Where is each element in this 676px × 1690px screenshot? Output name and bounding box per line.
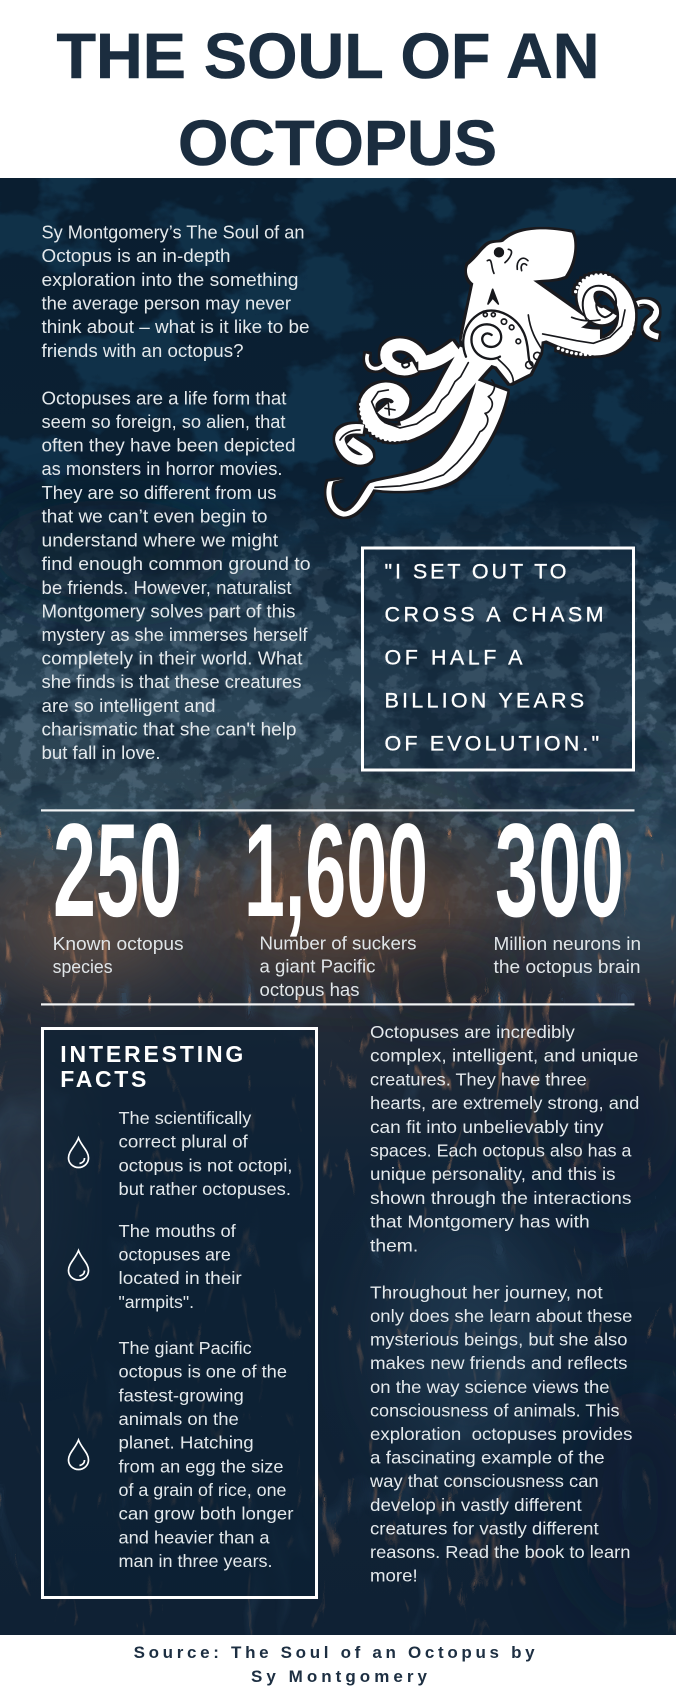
octopus line details — [340, 248, 653, 487]
right column text: them. — [370, 1235, 418, 1255]
intro text block: she finds is that these creatures — [42, 672, 302, 692]
stat: 250 species — [53, 797, 184, 977]
stats top divider — [41, 809, 634, 812]
fact 3 text — [118, 1338, 293, 1571]
right column text: more! — [370, 1566, 418, 1586]
intro text block: mystery as she immerses herself — [42, 625, 308, 645]
right column text: unique personality, and this is — [370, 1164, 616, 1184]
number 1,600: 1,600 — [244, 797, 428, 945]
facts heading: INTERESTING — [60, 1041, 243, 1067]
caption 250 — [53, 933, 184, 977]
caption 1,600 — [260, 932, 416, 1000]
intro text block: completely in their world. What — [42, 648, 302, 668]
right column text: Octopuses are incredibly — [370, 1022, 575, 1042]
intro text block: are so intelligent and — [42, 696, 216, 716]
right column text: Throughout her journey, not — [370, 1282, 603, 1302]
number 250: 250 — [53, 797, 182, 945]
facts heading: FACTS — [60, 1066, 146, 1092]
caption 300: the octopus brain — [494, 956, 640, 977]
caption 250: species — [53, 956, 113, 977]
intro text block: but fall in love. — [42, 743, 160, 763]
fact 2 icon: water drop — [68, 1250, 88, 1280]
right column text: consciousness of animals. This — [370, 1400, 620, 1420]
intro text block: that we can’t even begin to — [42, 506, 268, 526]
facts heading — [60, 1041, 243, 1092]
fact 2 text: located in their — [118, 1268, 242, 1288]
fact 3 icon: water drop — [68, 1440, 88, 1470]
stat: 300 neurons — [494, 797, 641, 977]
title: OCTOPUS — [178, 107, 497, 179]
right column text: on the way science views the — [370, 1377, 610, 1397]
intro text block: often they have been depicted — [42, 436, 296, 456]
octopus illustration — [326, 229, 658, 517]
intro text block: understand where we might — [42, 530, 278, 550]
fact 3 text: from an egg the size — [118, 1456, 284, 1476]
right column text: creatures for vastly different — [370, 1518, 599, 1538]
right column text: hearts, are extremely strong, and — [370, 1093, 639, 1113]
fact 1 text: octopus is not octopi, — [118, 1155, 292, 1175]
intro text block: find enough common ground to — [42, 554, 310, 574]
intro text block: charismatic that she can't help — [42, 720, 296, 740]
quote box: BILLION YEARS — [384, 689, 584, 713]
right column text: can fit into unbelievably tiny — [370, 1117, 604, 1137]
quote box: "I SET OUT TO — [384, 559, 566, 583]
intro text block: Octopuses are a life form that — [42, 388, 286, 408]
caption 300 — [494, 933, 641, 977]
fact 3 text: and heavier than a — [118, 1527, 270, 1547]
right column text — [369, 1022, 639, 1586]
quote box — [362, 548, 634, 770]
intro text block: Montgomery solves part of this — [42, 602, 296, 622]
right column text: spaces. Each octopus also has a — [370, 1140, 631, 1161]
source footer: Source: The Soul of an Octopus by — [134, 1643, 535, 1662]
right column text: shown through the interactions — [370, 1188, 631, 1208]
quote box: CROSS A CHASM — [384, 603, 604, 627]
caption 1,600: a giant Pacific — [260, 956, 376, 977]
intro text block: think about – what is it like to be — [42, 317, 310, 337]
stat: 1,600 suckers — [244, 797, 428, 1000]
intro text block: Octopus is an in-depth — [42, 246, 231, 266]
source footer: Sy Montgomery — [251, 1667, 428, 1686]
right column text: reasons. Read the book to learn — [370, 1542, 630, 1562]
intro text block: as monsters in horror movies. — [42, 459, 282, 479]
right column text: only does she learn about these — [370, 1306, 632, 1326]
right column text: a fascinating example of the — [370, 1448, 605, 1468]
fact 2 text — [118, 1221, 242, 1312]
fact 1 icon: water drop — [68, 1138, 88, 1168]
source footer — [134, 1643, 535, 1686]
fact 3 text: can grow both longer — [118, 1504, 293, 1524]
fact 3 text: octopus is one of the — [118, 1362, 287, 1382]
fact 1 text — [118, 1108, 292, 1199]
stats bottom divider — [41, 1003, 634, 1006]
right column text: exploration octopuses provides — [370, 1424, 632, 1444]
fact 1 text: correct plural of — [118, 1132, 249, 1152]
caption 1,600: octopus has — [260, 979, 360, 1000]
intro text block: be friends. However, naturalist — [42, 578, 292, 598]
intro text block: They are so different from us — [42, 483, 276, 503]
intro text block: exploration into the something — [42, 270, 298, 290]
fact 2 text: The mouths of — [118, 1221, 237, 1241]
fact 3 text: The giant Pacific — [118, 1338, 252, 1358]
caption 1,600: Number of suckers — [260, 932, 416, 953]
quote box: OF HALF A — [384, 645, 523, 669]
fact 3 text: man in three years. — [118, 1551, 273, 1571]
fact 1 text: but rather octopuses. — [118, 1179, 291, 1199]
caption 300: Million neurons in — [494, 933, 641, 954]
panel: interesting facts — [42, 1028, 316, 1598]
intro text block: Sy Montgomery’s The Soul of an — [42, 223, 304, 243]
fact 1 text: The scientifically — [118, 1108, 251, 1128]
octopus silhouette — [326, 229, 658, 517]
title: THE SOUL OF AN — [56, 20, 600, 92]
fact 2 text: "armpits". — [118, 1292, 194, 1312]
caption 250: Known octopus — [53, 933, 184, 954]
right column text: creatures. They have three — [370, 1069, 587, 1089]
title — [56, 20, 600, 179]
intro text block: seem so foreign, so alien, that — [42, 412, 286, 432]
right column text: complex, intelligent, and unique — [370, 1046, 638, 1066]
intro text block: the average person may never — [42, 294, 291, 314]
fact 3 text: animals on the — [118, 1409, 239, 1429]
right column text: that Montgomery has with — [370, 1212, 590, 1232]
intro text block: friends with an octopus? — [42, 341, 244, 361]
right column text: makes new friends and reflects — [370, 1353, 627, 1373]
right column text: mysterious beings, but she also — [370, 1330, 627, 1350]
right column text: way that consciousness can — [369, 1471, 599, 1491]
right column text: develop in vastly different — [370, 1495, 582, 1515]
fact 3 text: of a grain of rice, one — [118, 1480, 287, 1500]
fact 3 text: fastest-growing — [118, 1385, 244, 1405]
intro text block — [42, 223, 310, 763]
quote box: OF EVOLUTION." — [384, 732, 599, 756]
fact 2 text: octopuses are — [118, 1244, 231, 1265]
fact 3 text: planet. Hatching — [118, 1433, 254, 1453]
